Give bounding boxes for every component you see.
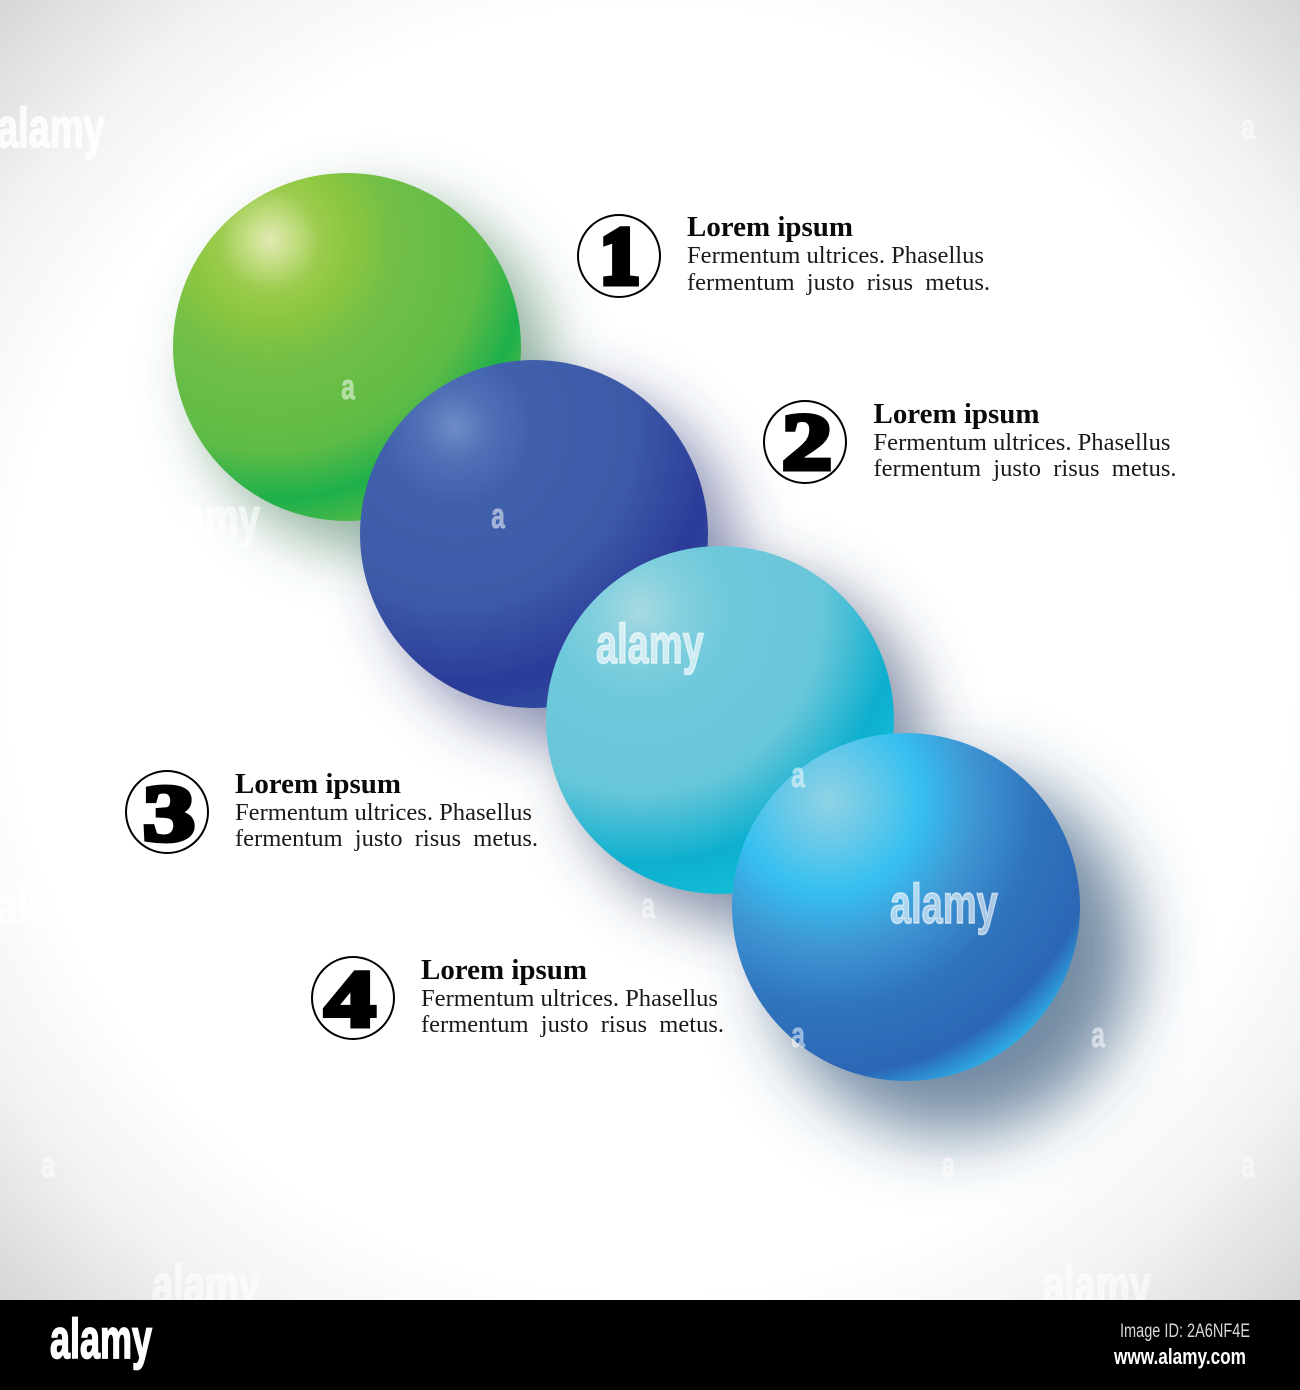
watermark on background: a xyxy=(1091,1014,1106,1055)
item 2 xyxy=(764,397,1176,487)
badge 1: 1 xyxy=(600,212,640,301)
item 3 text: Lorem ipsum xyxy=(235,769,401,800)
item 4 text: Fermentum ultrices. Phasellus xyxy=(421,986,718,1012)
footer url: www.alamy.com xyxy=(1113,1345,1246,1370)
badge 2 xyxy=(764,397,846,487)
item 3 text: Fermentum ultrices. Phasellus xyxy=(235,800,532,826)
item 1 text: fermentum justo risus metus. xyxy=(687,270,990,296)
item 2 text: Lorem ipsum xyxy=(874,399,1040,430)
watermark on spheres: a xyxy=(641,885,656,926)
item 1 text xyxy=(687,212,990,296)
watermark on spheres xyxy=(341,366,998,1055)
footer logo: alamy xyxy=(50,1307,152,1370)
badge 1 xyxy=(578,212,660,301)
item 3 text xyxy=(235,769,538,852)
item 2 text: fermentum justo risus metus. xyxy=(874,456,1176,482)
watermark on background: alamy xyxy=(1043,1255,1151,1317)
badge 3 xyxy=(126,769,208,858)
item 4 xyxy=(312,955,724,1043)
badge 4: 4 xyxy=(325,955,375,1043)
item 4 text: fermentum justo risus metus. xyxy=(421,1012,724,1038)
sphere 1: green xyxy=(173,173,521,521)
badge 3: 3 xyxy=(143,769,195,858)
watermark on spheres: a xyxy=(341,366,356,407)
footer bar xyxy=(0,1300,1300,1390)
badge 4 xyxy=(312,955,394,1043)
sphere shadows xyxy=(197,197,1134,1135)
watermark on spheres: a xyxy=(791,754,806,795)
sphere 3: cyan xyxy=(546,546,894,894)
watermark on background: a xyxy=(41,1144,56,1185)
item 2 text: Fermentum ultrices. Phasellus xyxy=(874,430,1170,456)
watermark on spheres: alamy xyxy=(890,874,998,936)
sphere 4: blue xyxy=(732,733,1080,1081)
watermark on background: alamy xyxy=(152,488,260,550)
watermark on background: alamy xyxy=(152,1255,260,1317)
footer image id: Image ID: 2A6NF4E xyxy=(1120,1319,1250,1342)
watermark on spheres: a xyxy=(791,1014,806,1055)
item 2 text xyxy=(874,399,1176,482)
item 1 xyxy=(578,212,990,301)
sphere 2: dark blue xyxy=(360,360,708,708)
item 3 text: fermentum justo risus metus. xyxy=(235,826,538,852)
watermark on spheres: a xyxy=(491,495,506,536)
item 4 text: Lorem ipsum xyxy=(421,955,587,986)
badge 2: 2 xyxy=(782,397,832,487)
watermark on background: a xyxy=(941,1144,956,1185)
item 1 text: Fermentum ultrices. Phasellus xyxy=(687,243,984,269)
item 3 xyxy=(126,769,538,858)
watermark on background: a xyxy=(1241,1144,1256,1185)
item 4 text xyxy=(421,955,724,1038)
item 1 text: Lorem ipsum xyxy=(687,212,853,243)
watermark on spheres: alamy xyxy=(596,614,704,676)
watermark on background: a xyxy=(1241,106,1256,147)
watermark on background: alamy xyxy=(0,98,105,160)
